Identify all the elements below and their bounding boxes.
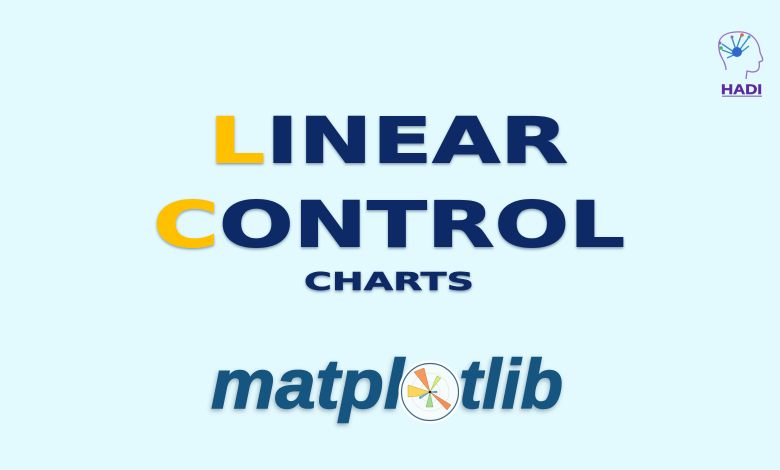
logo neural network <box>718 33 750 58</box>
title line: Linear: INEAR <box>266 104 568 178</box>
matplotlib wordmark: matpl <box>211 345 406 423</box>
title line: Linear: L <box>209 104 265 178</box>
polar wedges <box>408 368 451 410</box>
title line: Control <box>153 188 625 262</box>
title line: Linear <box>209 104 568 178</box>
title line: Control: ONTROL <box>219 188 625 262</box>
logo head outline <box>719 32 763 79</box>
subtitle: Charts: CHARTS <box>304 267 474 296</box>
matplotlib wordmark <box>211 345 563 423</box>
logo text: HADI <box>721 82 762 97</box>
title: Linear Control <box>153 104 625 296</box>
matplotlib wordmark: tlib <box>459 345 563 423</box>
icon: matplotlib polar chart <box>400 362 460 422</box>
title line: Control: C <box>153 188 219 262</box>
logo: Hadi head <box>718 32 763 97</box>
